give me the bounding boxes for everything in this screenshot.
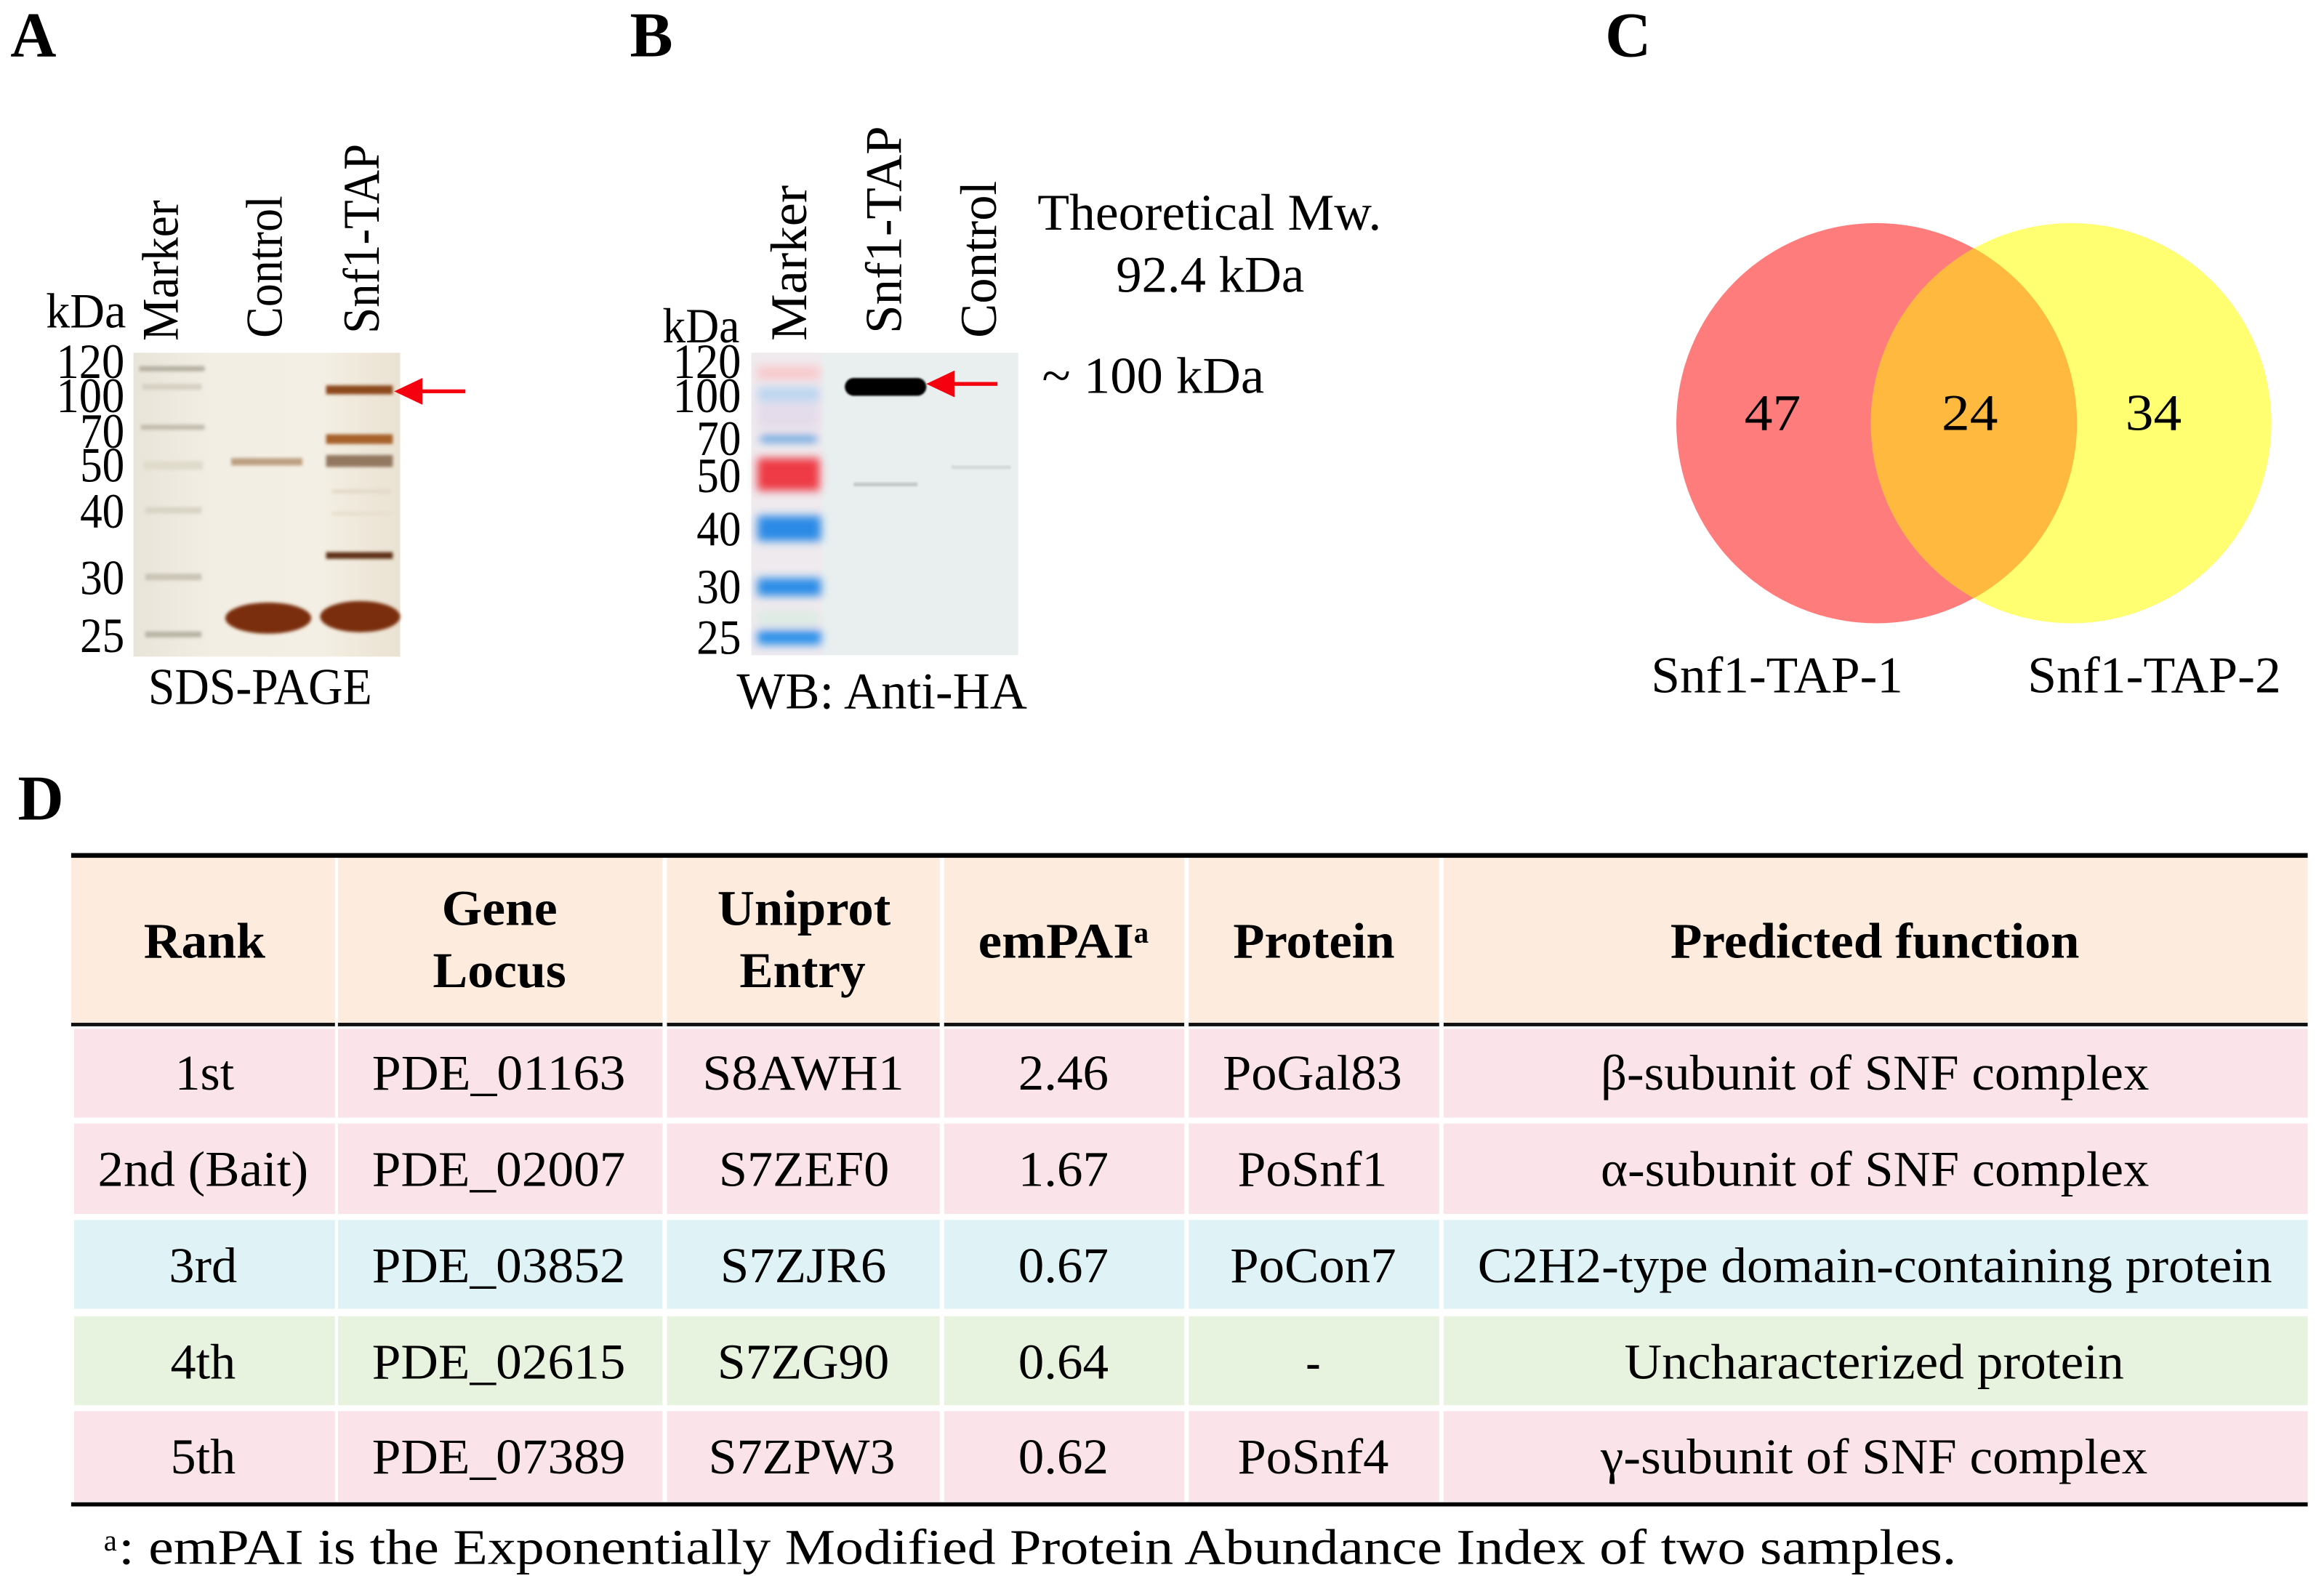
- row 1: PDE_01163: [372, 1045, 625, 1101]
- Venn counts: 47: [1745, 384, 1801, 441]
- row 3: C2H2-type domain-containing protein: [1478, 1237, 2272, 1293]
- lane labels A: [132, 144, 390, 341]
- row 3: PDE_03852: [372, 1237, 625, 1293]
- table header: Locus: [433, 942, 566, 998]
- lane labels A: Marker: [132, 200, 190, 341]
- row 2: S7ZEF0: [719, 1141, 889, 1196]
- panel letter B: B: [630, 0, 673, 70]
- table header: Entry: [739, 942, 866, 998]
- row 3: [169, 1237, 2272, 1293]
- panel letter C: C: [1605, 0, 1651, 70]
- row 2: 1.67: [1018, 1141, 1109, 1196]
- row 5: PDE_07389: [372, 1428, 625, 1484]
- Venn set labels: Snf1-TAP-1: [1651, 646, 1903, 704]
- blot image B: [752, 353, 1018, 655]
- table header: Protein: [1233, 912, 1395, 968]
- panel B: western blot: [630, 0, 1381, 720]
- row 4: 0.64: [1018, 1333, 1109, 1389]
- molecular weight ladder A: [46, 284, 126, 663]
- red arrow A: [394, 378, 465, 405]
- row 4: -: [1306, 1333, 1321, 1389]
- molecular weight ladder B: kDa: [662, 299, 739, 353]
- table header: a: [1134, 917, 1149, 949]
- lane labels A: Control: [236, 196, 293, 338]
- row 1: S8AWH1: [702, 1045, 904, 1101]
- row 4: Uncharacterized protein: [1625, 1333, 2124, 1389]
- row 1: [175, 1045, 2149, 1101]
- row 1: 2.46: [1018, 1045, 1109, 1101]
- row 2: PoSnf1: [1237, 1141, 1387, 1196]
- molecular weight ladder A: 70: [80, 404, 124, 459]
- row 4: S7ZG90: [717, 1333, 889, 1389]
- molecular weight ladder A: 30: [80, 551, 124, 606]
- table header: emPAI: [978, 912, 1134, 968]
- Venn counts: [1745, 384, 2182, 441]
- Venn set labels: Snf1-TAP-2: [2027, 646, 2281, 704]
- molecular weight ladder B: 25: [696, 610, 741, 664]
- molecular weight ladder B: [662, 299, 741, 664]
- row 5: γ-subunit of SNF complex: [1600, 1428, 2147, 1484]
- lane labels B: Marker: [760, 185, 818, 341]
- row 5: 5th: [170, 1428, 236, 1484]
- table header: Gene: [442, 880, 558, 936]
- row 4: PDE_02615: [372, 1333, 625, 1389]
- theoretical molecular weight note: 92.4 kDa: [1116, 246, 1304, 304]
- molecular weight ladder A: 50: [80, 438, 124, 493]
- caption WB Anti-HA: WB: Anti-HA: [736, 663, 1027, 720]
- panel letter A: A: [10, 0, 56, 70]
- table header: Uniprot: [717, 880, 890, 936]
- lane labels B: [760, 126, 1008, 341]
- molecular weight ladder B: 50: [696, 448, 741, 503]
- panel letter D: D: [17, 763, 64, 834]
- row 4: [170, 1333, 2124, 1389]
- panel D: protein table: [17, 763, 2308, 1574]
- row 5: S7ZPW3: [709, 1428, 895, 1484]
- gel image A: [134, 353, 401, 656]
- molecular weight ladder B: 40: [696, 502, 741, 556]
- row 5: 0.62: [1018, 1428, 1109, 1484]
- molecular weight ladder A: 120: [56, 334, 124, 389]
- row 3: 3rd: [169, 1237, 237, 1293]
- row 1: PoGal83: [1223, 1045, 1402, 1101]
- red arrow B: [926, 371, 997, 397]
- table header: Rank: [144, 912, 265, 968]
- molecular weight ladder B: 70: [696, 411, 741, 466]
- lane labels A: Snf1-TAP: [333, 144, 390, 334]
- table footnote: a: [104, 1524, 117, 1557]
- Venn counts: 34: [2126, 384, 2182, 441]
- table backgrounds: [71, 853, 2308, 1506]
- row 3: 0.67: [1018, 1237, 1109, 1293]
- row 1: 1st: [175, 1045, 234, 1101]
- observed size note: ~ 100 kDa: [1042, 347, 1264, 404]
- panel C: Venn diagram: [1605, 0, 2281, 704]
- row 3: S7ZJR6: [720, 1237, 886, 1293]
- row 5: [170, 1428, 2147, 1484]
- row 4: 4th: [170, 1333, 236, 1389]
- row 1: β-subunit of SNF complex: [1601, 1045, 2149, 1101]
- panel A: SDS-PAGE gel: [10, 0, 465, 716]
- caption SDS-PAGE: SDS-PAGE: [148, 659, 372, 716]
- lane labels B: Control: [950, 181, 1008, 338]
- molecular weight ladder A: 40: [80, 484, 124, 539]
- table header: [144, 880, 2080, 998]
- molecular weight ladder B: 30: [696, 560, 741, 614]
- lane labels B: Snf1-TAP: [856, 126, 913, 334]
- theoretical molecular weight note: [1037, 184, 1381, 304]
- Venn counts: 24: [1942, 384, 1998, 441]
- theoretical molecular weight note: Theoretical Mw.: [1037, 184, 1381, 241]
- row 2: 2nd (Bait): [98, 1141, 308, 1196]
- molecular weight ladder A: 25: [80, 608, 124, 663]
- row 3: PoCon7: [1230, 1237, 1396, 1293]
- row 5: PoSnf4: [1237, 1428, 1388, 1484]
- Venn set labels: [1651, 646, 2281, 704]
- row 2: PDE_02007: [372, 1141, 625, 1196]
- table footnote: : emPAI is the Exponentially Modified Protein Abundance Index of two samples.: [118, 1518, 1956, 1574]
- molecular weight ladder A: kDa: [46, 284, 126, 339]
- molecular weight ladder A: 100: [56, 369, 124, 423]
- Venn circles: [1676, 223, 2272, 623]
- molecular weight ladder B: 100: [673, 369, 741, 423]
- row 2: [98, 1141, 2149, 1196]
- table header: Predicted function: [1670, 912, 2080, 968]
- molecular weight ladder B: 120: [673, 334, 741, 389]
- row 2: α-subunit of SNF complex: [1601, 1141, 2149, 1196]
